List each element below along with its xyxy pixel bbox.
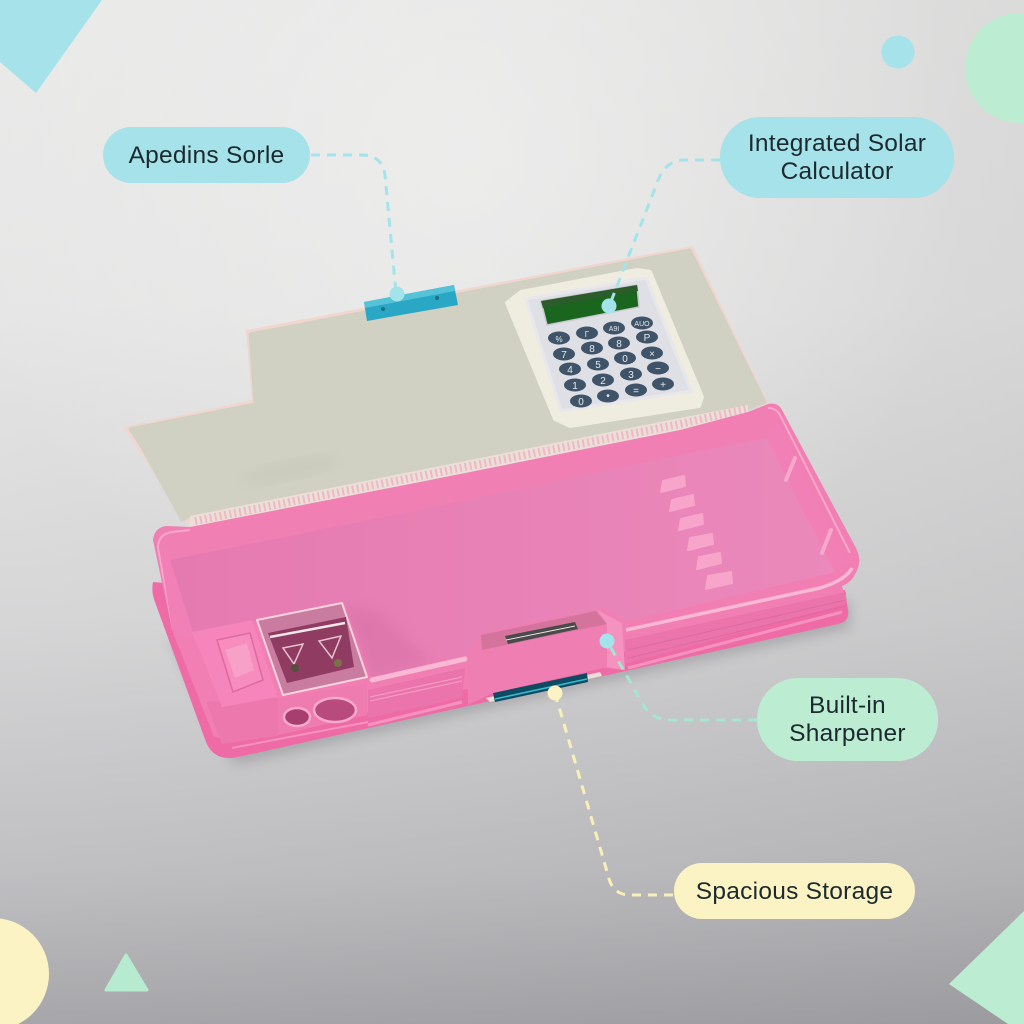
- calculator key legends: 0: [578, 397, 584, 408]
- right wall: [767, 420, 848, 572]
- sharpener compartment: [192, 603, 367, 735]
- anchor dot: storage: [548, 686, 562, 700]
- left wall: [160, 546, 196, 640]
- calculator key legends: 2: [600, 376, 606, 387]
- label: Apedins Sorle: [103, 127, 310, 183]
- inner rim highlight: [158, 408, 850, 630]
- anchor dot: Apedins Sorle: [390, 286, 404, 302]
- label: Spacious Storage: Spacious Storage: [696, 878, 893, 904]
- calculator key legends: AUO: [634, 321, 650, 328]
- calculator key legends: Γ: [585, 330, 590, 339]
- tray body: [152, 404, 859, 758]
- metal clasp on lid: [364, 285, 458, 321]
- calculator key legends: 0: [622, 354, 628, 365]
- anchor dot: calculator: [602, 298, 616, 314]
- front latch: [467, 610, 625, 705]
- zipper seam: [190, 405, 748, 528]
- pencil case: [125, 247, 859, 765]
- calculator key legends: 8: [589, 344, 595, 355]
- lower base lip: [152, 582, 848, 758]
- connector: Integrated Solar Calculator: [610, 160, 720, 304]
- calculator key legends: −: [655, 364, 661, 375]
- label: Built-in Sharpener: [757, 678, 938, 761]
- calculator key legends: 7: [561, 350, 567, 361]
- wall ribs: [786, 458, 831, 553]
- calculator key legends: •: [606, 391, 610, 402]
- pencil divider tabs: [661, 476, 732, 589]
- label: Integrated Solar Calculator: Calculator: [781, 158, 893, 185]
- anchor dot: sharpener: [600, 634, 614, 648]
- back wall: [166, 420, 835, 572]
- front wall shading: [625, 592, 846, 664]
- calculator: [507, 270, 702, 426]
- connector lines and anchor dots: [311, 155, 757, 895]
- lip highlight: [368, 612, 842, 725]
- shadow: [170, 600, 850, 765]
- calculator key legends: ×: [649, 349, 655, 360]
- floor: [170, 438, 835, 680]
- calculator key legends: 4: [567, 365, 573, 376]
- calculator key legends: A9I: [609, 326, 619, 333]
- label: Built-in Sharpener: Built-in: [809, 692, 886, 719]
- calculator key legends: %: [555, 335, 563, 344]
- calculator key legends: 1: [572, 381, 578, 392]
- connector: Spacious Storage: [555, 693, 673, 895]
- calculator key legends: 8: [616, 339, 622, 350]
- floor shadow near sharpener: [345, 606, 430, 678]
- label: Integrated Solar Calculator: [720, 117, 954, 198]
- upper shell: [153, 404, 859, 740]
- calculator key legends: =: [633, 386, 639, 397]
- calculator key legends: 3: [628, 370, 634, 381]
- right front rim: [626, 568, 852, 630]
- open lid: [125, 247, 768, 528]
- calculator key legends: [555, 321, 666, 408]
- left front rim: [372, 659, 465, 680]
- label: Apedins Sorle: Apedins Sorle: [129, 142, 284, 168]
- calculator key legends: P: [644, 333, 651, 344]
- connector: Built-in Sharpener: [607, 641, 757, 720]
- calculator key legends: +: [660, 380, 666, 391]
- label: Spacious Storage: [674, 863, 915, 919]
- label: Integrated Solar Calculator: Integrated Solar: [748, 130, 926, 157]
- connector: Apedins Sorle: [311, 155, 396, 293]
- calculator key legends: 5: [595, 360, 601, 371]
- label: Built-in Sharpener: Sharpener: [789, 720, 906, 747]
- calculator keys: [548, 316, 674, 408]
